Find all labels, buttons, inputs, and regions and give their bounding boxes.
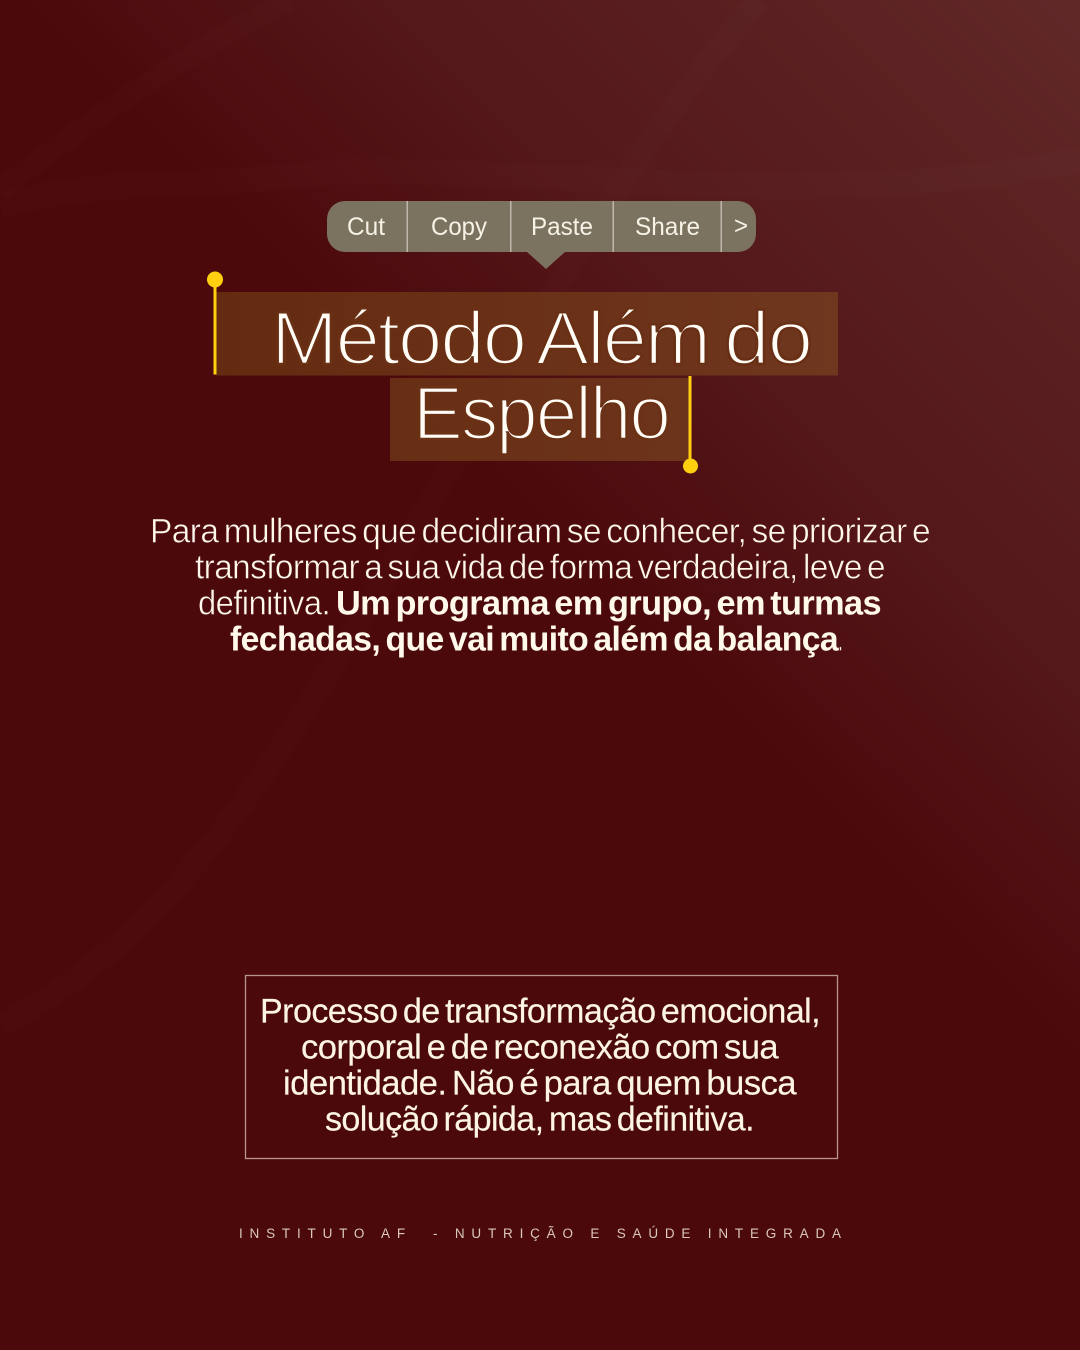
title line 1: Além xyxy=(536,296,709,380)
callout text xyxy=(260,992,820,1138)
callout text: identidade. Não é para quem busca xyxy=(283,1064,797,1102)
toolbar body xyxy=(327,201,756,269)
intro paragraph: Um programa em grupo, em turmas xyxy=(336,584,881,622)
callout box xyxy=(246,976,838,1158)
title line 1: Método xyxy=(271,296,525,380)
selection handle: end xyxy=(683,376,698,474)
intro paragraph: transformar a sua vida de forma verdadeira, leve e xyxy=(195,548,885,586)
intro paragraph: definitiva. xyxy=(198,584,330,622)
intro paragraph: Para mulheres que decidiram se conhecer, se priorizar e xyxy=(150,512,930,550)
title line 1: do xyxy=(724,296,811,380)
title line 1 xyxy=(271,296,811,380)
toolbar labels: > xyxy=(734,212,748,240)
intro paragraph: . xyxy=(838,620,843,658)
intro paragraph xyxy=(150,512,930,658)
title highlight line 2 xyxy=(390,378,690,461)
toolbar: text selection menu xyxy=(327,201,756,269)
footer: INSTITUTO AF - NUTRIÇÃO E SAÚDE INTEGRADA xyxy=(239,1226,841,1241)
toolbar labels: Share xyxy=(635,213,700,241)
title: highlighted selection xyxy=(207,272,838,474)
toolbar labels: Paste xyxy=(531,213,593,241)
toolbar labels xyxy=(347,212,748,241)
selection handle: start xyxy=(207,272,223,374)
callout text: corporal e de reconexão com sua xyxy=(301,1028,779,1066)
title highlight line 1 xyxy=(216,292,838,376)
title line 2: Espelho xyxy=(413,371,669,455)
toolbar labels: Copy xyxy=(431,213,487,241)
callout text: solução rápida, mas definitiva. xyxy=(325,1100,754,1138)
toolbar labels: Cut xyxy=(347,213,385,241)
callout text: Processo de transformação emocional, xyxy=(260,992,820,1030)
intro paragraph: fechadas, que vai muito além da balança xyxy=(230,620,840,658)
